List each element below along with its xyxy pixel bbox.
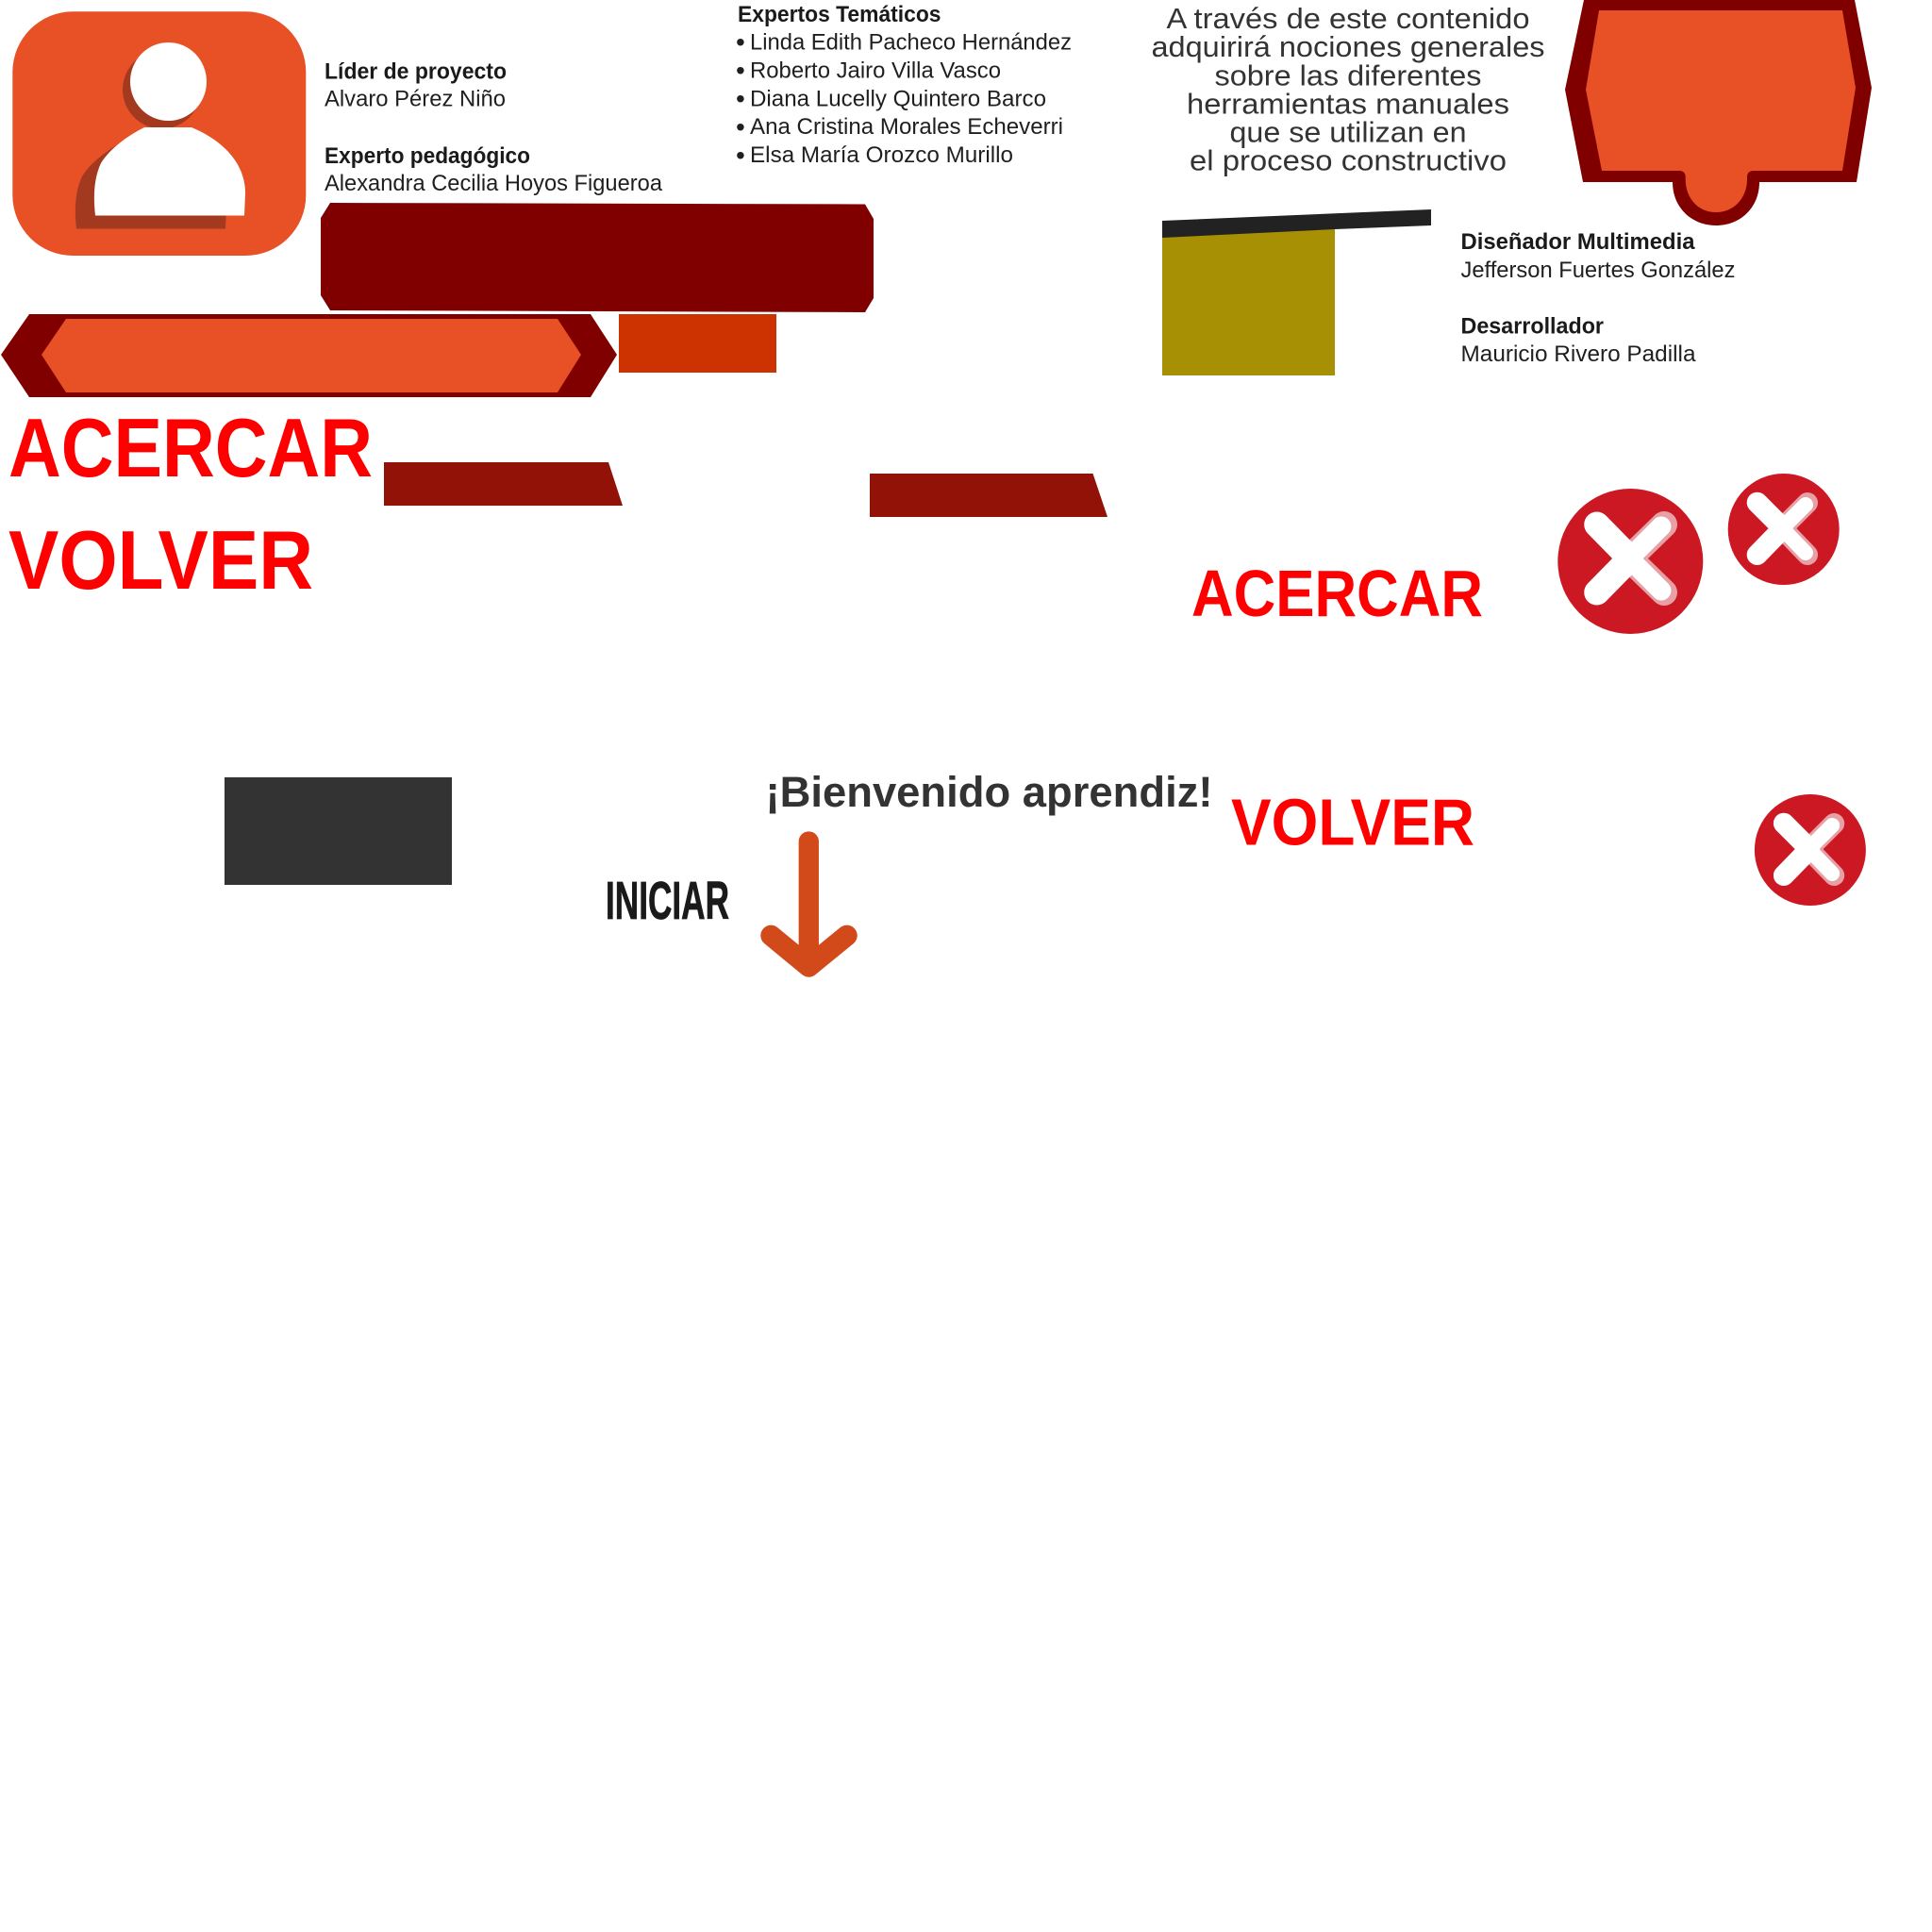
icon: close button large — [1557, 489, 1703, 634]
text block: subject experts: • — [736, 56, 745, 85]
panel: orange rectangle — [619, 314, 776, 373]
text block: project lead and pedagogical expert: Líder de proyecto — [325, 58, 507, 85]
text block: introduction: sobre las diferentes — [1215, 58, 1481, 92]
text block: subject experts: Expertos Temáticos — [738, 2, 941, 27]
icon: close button bottom right — [1755, 794, 1866, 906]
text block: multimedia designer and developer: Jefferson Fuertes González — [1460, 258, 1736, 283]
panel: dark red rectangle — [321, 203, 874, 312]
text block: introduction: adquirirá nociones generales — [1151, 30, 1545, 63]
text block: subject experts — [736, 2, 1072, 170]
text block: subject experts: Roberto Jairo Villa Vasco — [750, 58, 1001, 84]
shape: red slanted bar two — [870, 474, 1108, 517]
icon: close button top right — [1728, 474, 1840, 585]
arrow: down — [771, 841, 847, 967]
text block: multimedia designer and developer: Mauricio Rivero Padilla — [1460, 341, 1696, 367]
text block: multimedia designer and developer: Diseñador Multimedia — [1460, 229, 1695, 255]
panel: dark grey rectangle — [225, 777, 452, 885]
label: small VOLVER: VOLVER — [1231, 785, 1474, 858]
text block: subject experts: Elsa María Orozco Murillo — [750, 142, 1013, 168]
text block: multimedia designer and developer: Desarrollador — [1460, 313, 1604, 340]
text block: subject experts: • — [736, 27, 745, 57]
text block: multimedia designer and developer — [1460, 229, 1736, 367]
text block: introduction: el proceso constructivo — [1190, 143, 1507, 177]
text block: introduction: herramientas manuales — [1187, 87, 1509, 121]
panel: hexagonal banner — [1, 314, 617, 397]
label: large ACERCAR: ACERCAR — [8, 401, 373, 494]
text block: subject experts: Linda Edith Pacheco Hernández — [750, 30, 1072, 56]
icon: user avatar — [12, 11, 306, 256]
panel: gold flag with black bar — [1162, 209, 1431, 375]
text block: subject experts: Ana Cristina Morales Echeverri — [750, 114, 1063, 140]
text block: introduction — [1151, 2, 1545, 177]
text block: introduction: que se utilizan en — [1230, 115, 1466, 149]
text block: subject experts: • — [736, 112, 745, 142]
text block: project lead and pedagogical expert: Experto pedagógico — [325, 143, 530, 169]
shape: red slanted bar one — [384, 462, 623, 506]
heading: welcome: ¡Bienvenido aprendiz! — [766, 768, 1213, 816]
label: small ACERCAR: ACERCAR — [1191, 557, 1483, 630]
text block: project lead and pedagogical expert — [325, 58, 662, 196]
text block: subject experts: • — [736, 84, 745, 113]
label: large VOLVER: VOLVER — [8, 513, 313, 607]
text block: introduction: A través de este contenido — [1166, 2, 1530, 35]
label: start: INICIAR — [606, 871, 729, 931]
text block: subject experts: Diana Lucelly Quintero Barco — [750, 87, 1046, 111]
text block: project lead and pedagogical expert: Alexandra Cecilia Hoyos Figueroa — [325, 171, 662, 196]
panel: orange tabbed badge — [1565, 0, 1872, 225]
text block: project lead and pedagogical expert: Alvaro Pérez Niño — [325, 87, 506, 111]
text block: subject experts: • — [736, 141, 745, 170]
